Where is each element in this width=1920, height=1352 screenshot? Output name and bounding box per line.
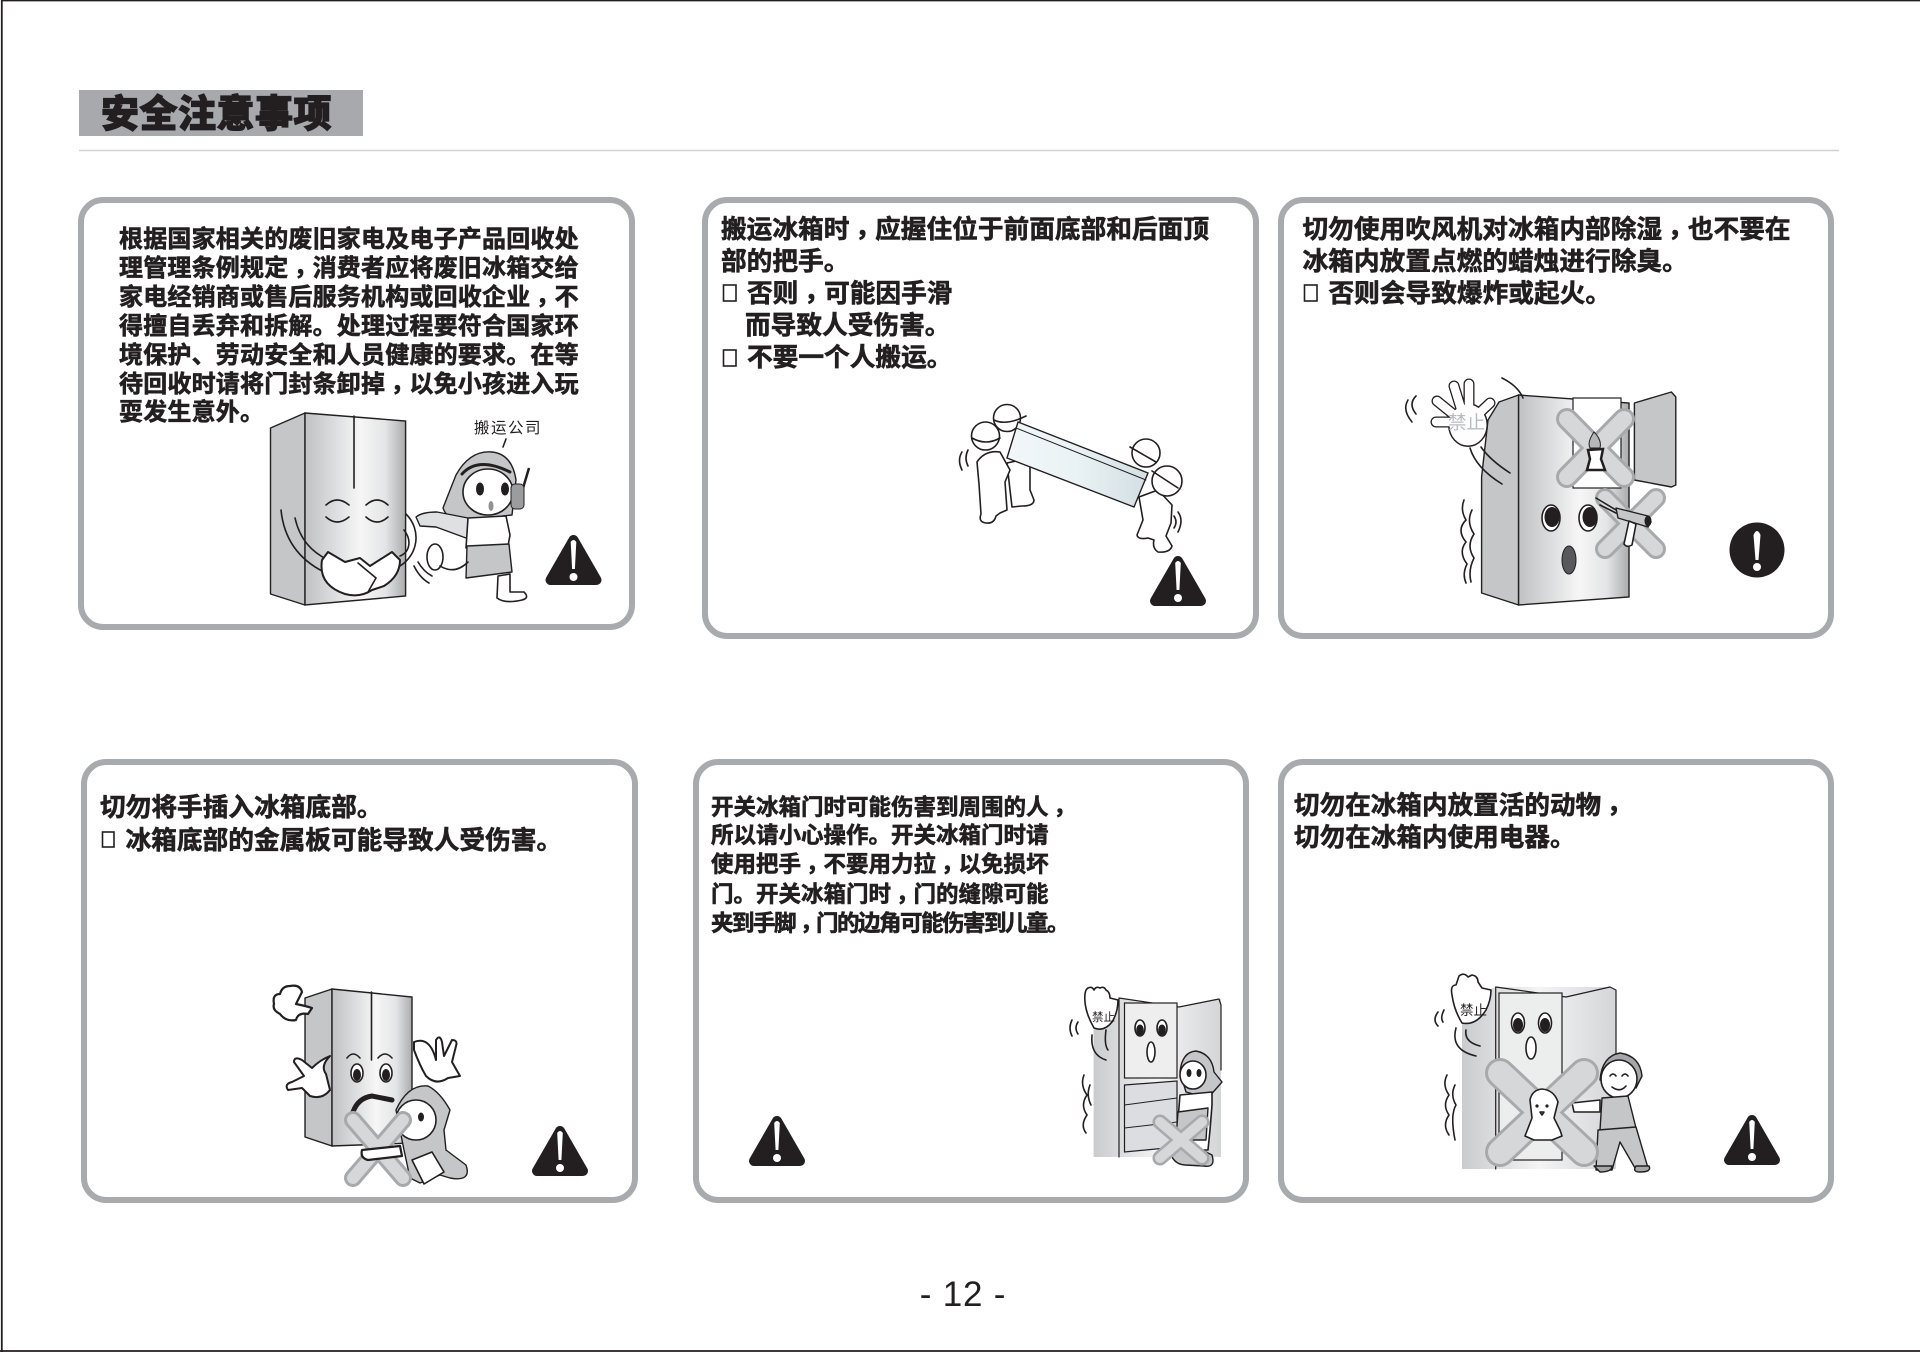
- text: door safety notice: 开关冰箱门时可能伤害到周围的人，: [711, 795, 1071, 828]
- text: disposal notice: 理管理条例规定，消费者应将废旧冰箱交给: [119, 254, 579, 289]
- icon: warning triangle: [537, 1131, 583, 1172]
- toddler at door gap: [1170, 1144, 1213, 1166]
- icon: warning triangle: [754, 1121, 800, 1162]
- text: carrying instructions: 而导致人受伤害。: [745, 311, 950, 340]
- panel: no hair dryer or candle: [1281, 200, 1831, 636]
- text: metal plate warning: 切勿将手插入冰箱底部。: [100, 793, 383, 822]
- right workers: [1130, 439, 1182, 552]
- icon: warning triangle: [550, 540, 596, 581]
- text: disposal notice: 待回收时请将门封条卸掉，以免小孩进入玩: [119, 370, 579, 405]
- text: carrying instructions: [721, 214, 1209, 372]
- cross mark: dog: [1500, 1073, 1584, 1152]
- text: disposal notice: 根据国家相关的废旧家电及电子产品回收处: [119, 226, 579, 253]
- text: metal plate warning: [100, 793, 562, 855]
- left workers: [960, 404, 1034, 523]
- text: metal plate warning: 冰箱底部的金属板可能导致人受伤害。: [126, 826, 562, 855]
- icon: stop glove: 禁止: [1448, 412, 1485, 433]
- text: door safety notice: 夹到手脚，门的边角可能伤害到儿童。: [711, 910, 1068, 944]
- icon: warning triangle: [1155, 561, 1201, 602]
- illustration: girl with phone: [416, 419, 542, 602]
- right hand: [414, 1037, 460, 1082]
- icon: exclamation circle: [1730, 522, 1784, 578]
- text: door safety notice: 门。开关冰箱门时，门的缝隙可能: [711, 882, 1049, 915]
- panel: hands under fridge: [84, 762, 635, 1200]
- text: carrying instructions: 搬运冰箱时，应握住位于前面底部和后面顶: [721, 214, 1209, 252]
- text: disposal notice: 家电经销商或售后服务机构或回收企业，不: [119, 283, 579, 318]
- illustration: fridge with child reaching underneath: [274, 986, 467, 1184]
- text: animals warning: 切勿在冰箱内放置活的动物，: [1294, 791, 1627, 828]
- text: disposal notice: [119, 226, 579, 426]
- girl standing: [1176, 1051, 1222, 1150]
- cross mark: under fridge: [353, 1120, 403, 1178]
- text: animals warning: [1294, 791, 1627, 852]
- illustration: four workers carrying fridge: [960, 404, 1182, 552]
- text: door safety notice: 使用把手，不要用力拉，以免损坏: [711, 851, 1049, 885]
- text: disposal notice: 境保护、劳动安全和人员健康的要求。在等: [119, 342, 579, 369]
- text: dryer and candle warning: 否则会导致爆炸或起火。: [1328, 279, 1611, 308]
- fridge panel: [1007, 422, 1148, 507]
- panel: opening doors carefully: [696, 762, 1246, 1200]
- text: disposal notice: 得擅自丢弃和拆解。处理过程要符合国家环: [119, 312, 579, 340]
- illustration: open fridge with child at door: [1070, 987, 1222, 1157]
- text: dryer and candle warning: 冰箱内放置点燃的蜡烛进行除臭。: [1302, 246, 1688, 276]
- icon: warning triangle: [1729, 1120, 1775, 1161]
- text: carrying instructions: 部的把手。: [721, 247, 849, 276]
- icon: stop glove: [1452, 974, 1491, 1023]
- text: dryer and candle warning: 切勿使用吹风机对冰箱内部除湿，也不要在: [1302, 214, 1791, 252]
- text: disposal notice: 耍发生意外。: [119, 398, 264, 426]
- illustration: fridge with dog and boy: [1435, 974, 1650, 1172]
- boy pushing: [1572, 1053, 1650, 1172]
- left hand: [287, 1056, 330, 1097]
- icon: stop glove: 禁止: [1092, 1011, 1115, 1024]
- illustration: surprised fridge with open door: [1406, 378, 1676, 605]
- text: door safety notice: 所以请小心操作。开关冰箱门时请: [711, 823, 1049, 848]
- text: dryer and candle warning: [1302, 214, 1791, 308]
- icon: stop glove: [1085, 987, 1118, 1029]
- text: door safety notice: [711, 795, 1071, 944]
- panel: no live animals or appliances: [1281, 762, 1831, 1200]
- illustration: fridge with hands folded: [270, 413, 432, 605]
- icon: stop glove: [1406, 378, 1523, 447]
- label: moving company: 搬运公司: [474, 419, 542, 437]
- text: carrying instructions: 否则，可能因手滑: [747, 279, 952, 316]
- page number: - 12 -: [920, 1275, 1006, 1314]
- panel: recycling disposal: [81, 200, 632, 627]
- icon: stop glove: 禁止: [1460, 1003, 1487, 1018]
- cross mark: door gap: [1160, 1122, 1202, 1158]
- text: animals warning: 切勿在冰箱内使用电器。: [1294, 823, 1576, 852]
- cross mark: candle: [1567, 419, 1624, 477]
- panel: carrying the fridge: [705, 200, 1256, 636]
- text: carrying instructions: 不要一个人搬运。: [747, 343, 952, 372]
- title bar: 安全注意事项: [101, 93, 332, 136]
- cross mark: hair dryer: [1596, 498, 1656, 549]
- girl crouching: [396, 1086, 467, 1184]
